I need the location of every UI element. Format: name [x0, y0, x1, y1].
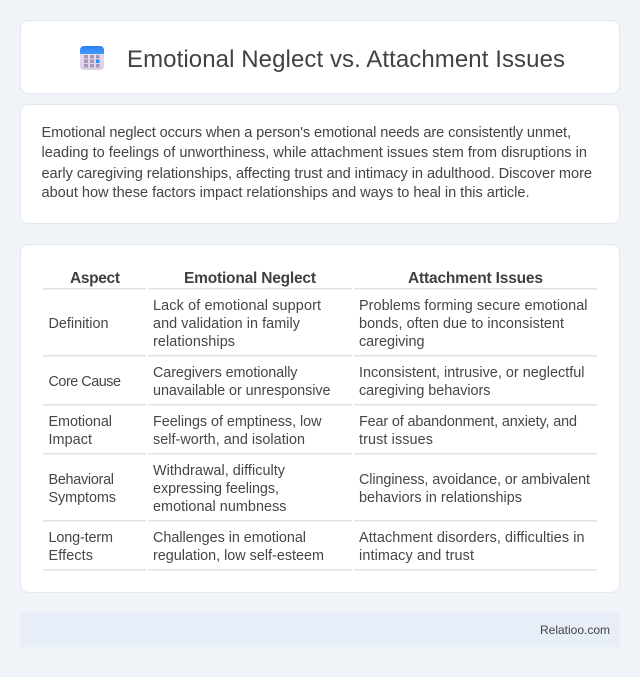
text block: introduction: Emotional neglect occurs when a person's emotional needs are consistently unmet, — [42, 125, 571, 141]
table row: behavioral symptoms: expressing feelings, — [153, 481, 279, 497]
table row: behavioral symptoms: Clinginess, avoidance, or ambivalent — [359, 472, 590, 488]
table row: emotional impact: Emotional — [48, 414, 112, 430]
table row: definition: Problems forming secure emotional — [359, 298, 588, 314]
table row: definition: bonds, often due to inconsistent — [359, 316, 564, 332]
table row: definition: and validation in family — [153, 316, 301, 332]
table row: behavioral symptoms: Withdrawal, difficulty — [153, 463, 286, 479]
table row: long-term effects: intimacy and trust — [359, 548, 474, 564]
table header row: Attachment Issues — [408, 270, 543, 287]
table row: core cause: Caregivers emotionally — [153, 365, 298, 381]
text block: introduction: about how these factors impact relationships and ways to heal in this article. — [42, 185, 530, 201]
table row: definition — [43, 298, 597, 356]
panel: title card — [20, 20, 620, 94]
text block: introduction: leading to feelings of unworthiness, while attachment issues stem from disruptions in — [42, 145, 587, 161]
table row: definition: relationships — [153, 334, 235, 350]
table row: core cause: caregiving behaviors — [359, 383, 490, 399]
panel: comparison table card — [20, 244, 620, 592]
title: Emotional Neglect vs. Attachment Issues — [127, 46, 565, 73]
table header row: Aspect — [70, 270, 120, 287]
text block: introduction — [42, 125, 592, 201]
table row: long-term effects: Attachment disorders, difficulties in — [359, 530, 584, 546]
text block: introduction: early caregiving relationships, affecting trust and intimacy in adulthood. Discover more — [42, 166, 592, 182]
table row: emotional impact: Impact — [48, 432, 92, 448]
footer credit: Relatioo.com — [540, 623, 610, 637]
panel: introduction card — [20, 104, 620, 224]
table row: core cause: Inconsistent, intrusive, or neglectful — [359, 365, 584, 381]
table header row — [43, 270, 597, 290]
table row: long-term effects: Long-term — [48, 530, 113, 546]
table row: definition: Lack of emotional support — [153, 298, 321, 314]
table row: long-term effects — [43, 530, 597, 570]
table header row: Emotional Neglect — [184, 270, 316, 287]
table row: behavioral symptoms: Symptoms — [48, 490, 116, 506]
table row: core cause: unavailable or unresponsive — [153, 383, 330, 399]
table row: definition: caregiving — [359, 334, 424, 350]
table row: core cause: Core Cause — [48, 374, 121, 390]
table row: behavioral symptoms: behaviors in relationships — [359, 490, 522, 506]
table row: emotional impact: Fear of abandonment, anxiety, and — [359, 414, 577, 430]
table row: emotional impact — [43, 414, 597, 454]
table row: behavioral symptoms: emotional numbness — [153, 499, 286, 515]
table row: emotional impact: trust issues — [359, 432, 433, 448]
footer bar — [20, 613, 620, 647]
table row: emotional impact: Feelings of emptiness, low — [153, 414, 322, 430]
table row: emotional impact: self-worth, and isolation — [153, 432, 305, 448]
table row: long-term effects: Challenges in emotional — [153, 530, 306, 546]
table row: long-term effects: Effects — [48, 548, 93, 564]
table row: behavioral symptoms — [43, 463, 597, 522]
table row: definition: Definition — [48, 316, 108, 332]
table row: core cause — [43, 365, 597, 406]
table row: long-term effects: regulation, low self-esteem — [153, 548, 324, 564]
icon: calendar — [80, 46, 104, 70]
table row: behavioral symptoms: Behavioral — [48, 472, 114, 488]
